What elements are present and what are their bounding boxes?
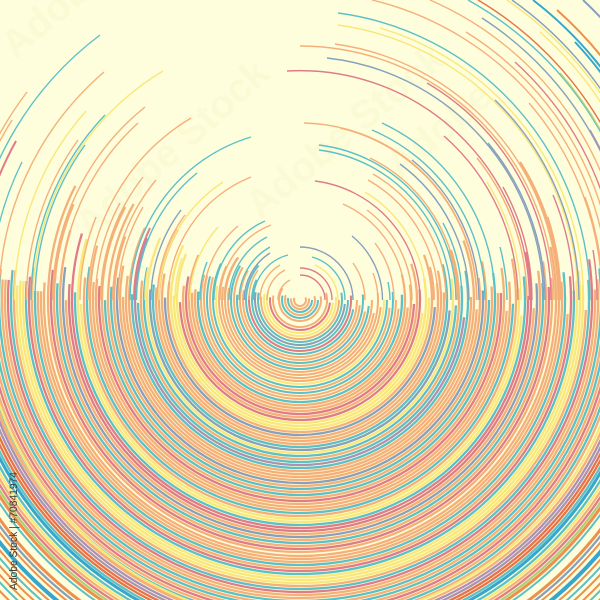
- upper right arcs: [287, 0, 600, 300]
- faint diagonal watermarks: [0, 0, 501, 247]
- upper left arcs: [0, 35, 290, 300]
- stock image id label: Adobe Stock | #70841974: [8, 472, 20, 590]
- faint diagonal watermarks: Adobe Stock: [67, 50, 278, 247]
- faint diagonal watermarks: Adobe Stock: [238, 36, 454, 227]
- faint diagonal watermarks: Adobe: [378, 73, 501, 187]
